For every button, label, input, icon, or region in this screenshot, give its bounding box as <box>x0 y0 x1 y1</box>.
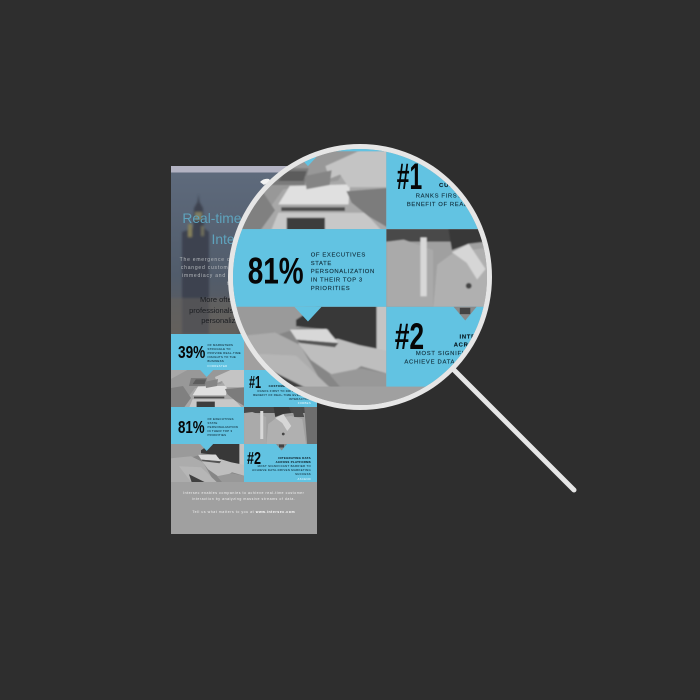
panel: 39%, magnified <box>232 76 386 151</box>
subheading: More often than not, these <box>200 295 288 304</box>
stat text: PROVIDE REAL-TIME <box>208 351 241 355</box>
stat text: STATE <box>310 258 331 267</box>
stat text: PERSONALIZATION <box>208 425 238 429</box>
intro paragraph: changed customer expectations for brands <box>181 265 307 271</box>
stat 81%: 81% <box>248 249 304 291</box>
stat #2: #2 <box>247 448 261 468</box>
stat text: IN THEIR TOP 3 <box>208 429 232 433</box>
stat text: PRIORITIES <box>208 433 226 437</box>
source: FORBES <box>298 400 311 404</box>
photo: woman in trench coat <box>244 407 317 444</box>
intro paragraph: the journey <box>227 281 260 287</box>
photo: phone on laptop, magnified <box>236 306 386 386</box>
stat text: ACROSS PLATFORMS <box>276 460 311 464</box>
footer call to action: Tell us what matters to you at www.intersec.com <box>192 510 295 514</box>
stat text: PERSONALIZATION <box>310 267 374 275</box>
footer text: interaction by analyzing massive streams of data. <box>192 497 295 501</box>
source: ASCEND <box>298 477 311 481</box>
subheading: personalization as priority <box>201 316 286 325</box>
stat text: INTEGRATING DATA <box>278 456 311 460</box>
panel: #1, magnified <box>386 151 540 229</box>
stat 81%: 81% <box>178 416 204 436</box>
subheading: professionals have identified real <box>189 306 298 315</box>
stat text: OF MARKETERS <box>208 343 233 347</box>
stat text: BENEFIT OF REAL-TIME EVENT USE <box>253 393 311 397</box>
white logo mark <box>260 178 270 185</box>
stat 39%: 39% <box>178 342 205 362</box>
pointer notches <box>200 370 287 451</box>
photo: laptop and paper <box>171 370 244 407</box>
title <box>182 211 305 247</box>
stat text: MOST SIGNIFICANT BARRIER TO <box>258 464 311 468</box>
panel: #1 <box>244 370 317 407</box>
intro paragraph: immediacy and speed across every single <box>182 273 305 279</box>
panel: #2, magnified <box>386 307 540 387</box>
pointer notches, magnified <box>294 156 476 322</box>
title: Interaction <box>212 232 276 247</box>
stat text <box>208 417 238 437</box>
title: Real-time Customer <box>182 211 305 226</box>
panel: #2 <box>244 444 317 482</box>
infographic page (small) <box>170 166 317 534</box>
stat text: STRUGGLE TO <box>208 347 231 351</box>
magnifying lens <box>228 144 492 410</box>
stat text: IN THEIR TOP 3 <box>310 275 362 284</box>
stat text: INSIGHTS TO THE <box>208 355 236 359</box>
stat text <box>253 389 311 401</box>
panel: 39% <box>170 334 244 370</box>
stat text: BUSINESS <box>208 359 224 363</box>
intro paragraph <box>180 257 308 287</box>
stat text: OF EXECUTIVES <box>208 417 234 421</box>
subheading <box>189 295 298 325</box>
header photo <box>171 166 287 334</box>
stat #1: #1 <box>249 372 261 392</box>
stat lead: CUSTOMER EXPERIENCE <box>269 384 311 388</box>
source: FORRESTER <box>208 364 227 368</box>
stat text <box>208 343 241 363</box>
stat text: OF EXECUTIVES <box>310 250 365 258</box>
stat text <box>252 456 311 476</box>
stat text: SUCCESS <box>295 472 311 476</box>
stat text: PRIORITIES <box>310 284 350 292</box>
stat text <box>310 250 374 292</box>
stat text: RANKS FIRST TO DRIVE THE TOP <box>258 389 311 393</box>
panel: 81%, magnified <box>232 229 386 307</box>
stat text: ACHIEVE DATA-DRIVEN MARKETING <box>252 468 311 472</box>
stat #1: #1 <box>397 156 422 198</box>
footer text: Intersec enables companies to achieve real-time customer <box>183 491 304 495</box>
header photo, magnified <box>232 0 540 76</box>
photo: phone on laptop <box>171 444 244 482</box>
magnified infographic page <box>232 0 540 495</box>
intro paragraph: The emergence of social media has forever <box>180 257 308 263</box>
stat text <box>406 191 492 216</box>
panel: 81% <box>170 407 244 444</box>
footer text <box>183 491 304 501</box>
stat text <box>404 332 492 366</box>
photo: laptop and paper, magnified <box>242 151 386 229</box>
stat #2: #2 <box>394 315 423 357</box>
stat text: STATE <box>208 421 218 425</box>
stat text: INTERACTION <box>289 397 311 401</box>
photo: woman in trench coat, magnified <box>386 229 487 306</box>
